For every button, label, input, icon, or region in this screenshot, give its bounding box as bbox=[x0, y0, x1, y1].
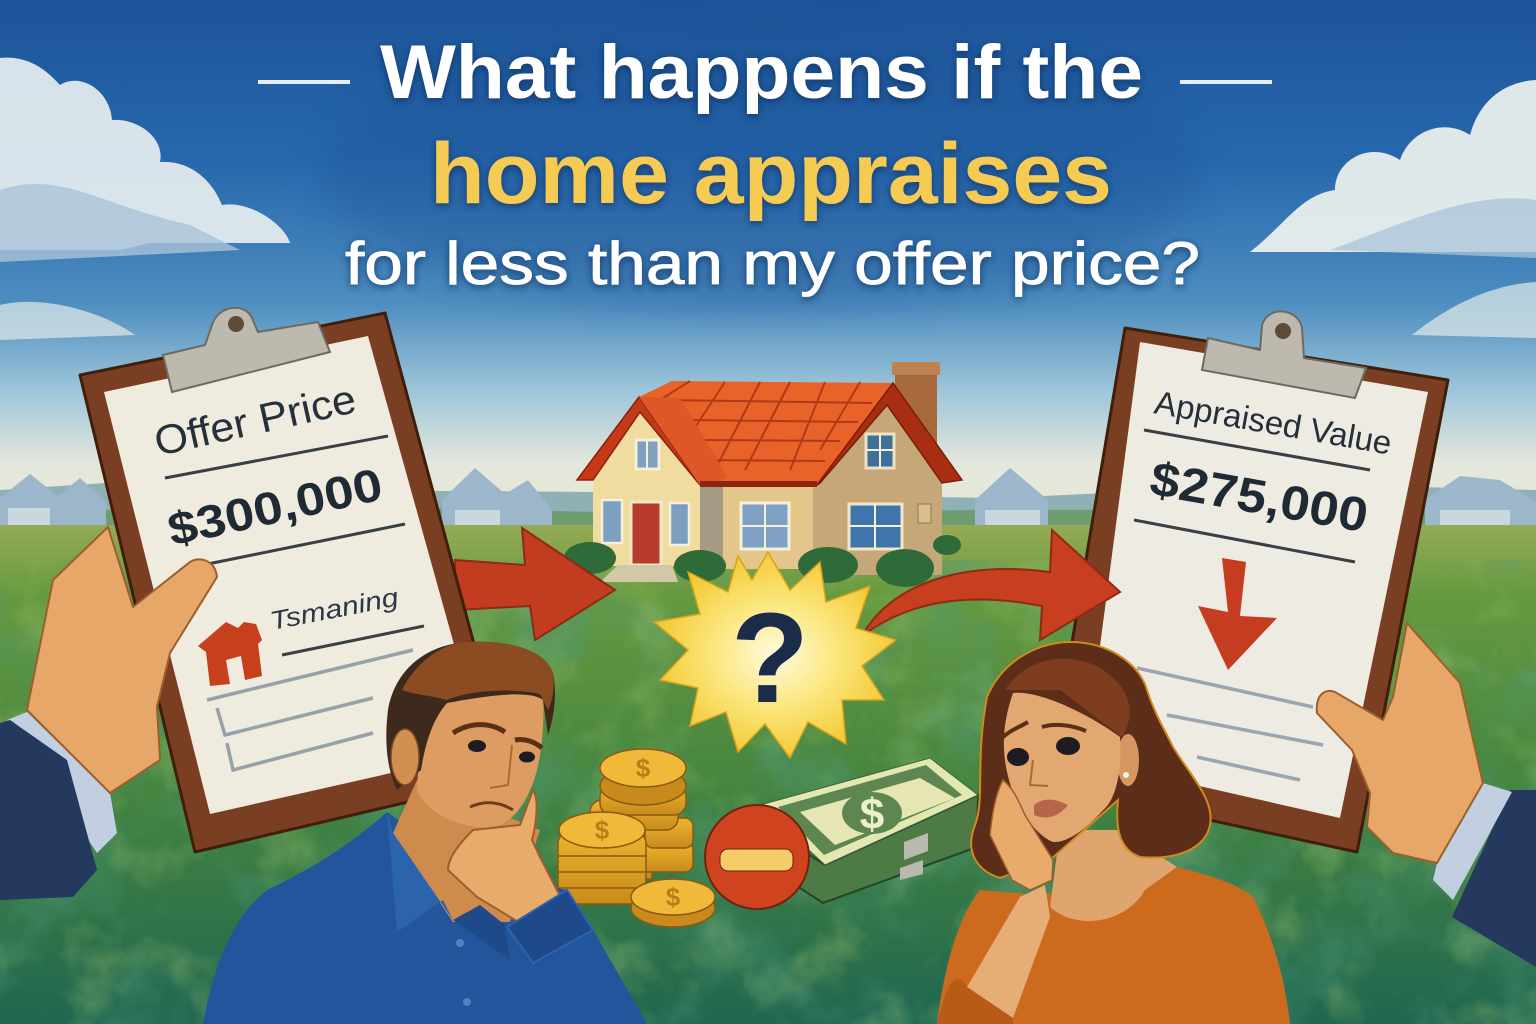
coin stack: back bbox=[590, 749, 693, 879]
bill patches bbox=[800, 778, 955, 845]
collar right bbox=[453, 905, 510, 960]
rule bbox=[1144, 430, 1370, 470]
bands bbox=[900, 833, 928, 880]
house: left gable overlap bbox=[639, 397, 728, 485]
house: bushes bbox=[564, 535, 961, 587]
clipboard: offer price bbox=[80, 308, 510, 852]
icon: red house bbox=[198, 622, 262, 686]
clipboard clip bbox=[1202, 311, 1366, 398]
cuff bbox=[1433, 783, 1512, 900]
collar left bbox=[387, 812, 453, 932]
house: right window bbox=[849, 504, 902, 549]
label: offer price: Offer Price bbox=[150, 376, 360, 465]
coin: single: $ bbox=[666, 882, 681, 912]
neck bbox=[393, 780, 540, 922]
question mark: ? bbox=[731, 587, 809, 730]
rule bbox=[1134, 520, 1355, 562]
bill inner bbox=[778, 765, 962, 855]
hand: left bbox=[0, 527, 217, 900]
background: sky bbox=[0, 0, 1536, 540]
dollar sign: $ bbox=[860, 790, 884, 839]
sleeve shadow bbox=[937, 979, 1013, 1024]
brows bbox=[453, 725, 542, 748]
title bbox=[345, 30, 1200, 297]
woman: worried bbox=[937, 642, 1290, 1024]
face bbox=[417, 683, 543, 828]
sleeve bbox=[0, 720, 97, 900]
house: eaves bbox=[700, 481, 817, 487]
house: right gable roof bbox=[817, 383, 962, 485]
shirt bbox=[203, 812, 647, 1024]
clipboard paper bbox=[104, 336, 484, 814]
palm and thumb bbox=[27, 527, 217, 793]
cuff bbox=[7, 712, 117, 853]
form lines bbox=[207, 650, 413, 770]
mouth bbox=[1034, 800, 1068, 818]
face bbox=[1004, 693, 1120, 842]
cuff bbox=[507, 890, 593, 963]
house: main roof bbox=[639, 381, 893, 485]
background: green field bbox=[0, 525, 1536, 1024]
palm and thumb bbox=[1317, 623, 1483, 863]
title line: for less than my offer price: for less than my offer price? bbox=[345, 230, 1200, 297]
clipboard clip bbox=[163, 308, 330, 392]
label: appraised value: Appraised Value bbox=[1152, 383, 1395, 462]
house: door side window left bbox=[602, 500, 622, 543]
mouth bbox=[470, 803, 513, 810]
cloud: low right bbox=[1412, 282, 1536, 338]
background: distant houses right bbox=[975, 468, 1536, 530]
form lines bbox=[1137, 668, 1323, 780]
house: door bbox=[631, 502, 661, 565]
house bbox=[564, 362, 962, 587]
house: left gable window bbox=[636, 440, 659, 469]
rule bbox=[165, 436, 388, 478]
house: left gable roof bbox=[577, 397, 700, 485]
ear bbox=[1117, 734, 1139, 786]
arrow: offer to house bbox=[455, 528, 615, 640]
top bbox=[937, 867, 1290, 1024]
hand on cheek bbox=[990, 780, 1053, 890]
house: right gable window bbox=[866, 434, 894, 468]
man: worried bbox=[203, 642, 647, 1024]
house: window bars bbox=[647, 434, 902, 549]
house: wall lamp bbox=[918, 504, 931, 523]
cloud: upper right bbox=[1250, 80, 1536, 258]
background: distant hills and trees bbox=[0, 482, 1536, 535]
hair bbox=[386, 642, 555, 790]
house: left gable wall bbox=[593, 408, 700, 566]
house: roof tile lines bbox=[660, 381, 872, 470]
clipboard board bbox=[1048, 328, 1448, 852]
icon: question starburst bbox=[654, 552, 896, 758]
nose bbox=[490, 745, 512, 788]
title line: what happens if the: What happens if the bbox=[380, 30, 1143, 115]
coin: single bbox=[631, 879, 715, 927]
title rule: right bbox=[1180, 80, 1272, 84]
eyes bbox=[1007, 737, 1080, 766]
eyes bbox=[468, 740, 535, 762]
clipboard paper bbox=[1085, 342, 1428, 818]
hand: right bbox=[1317, 623, 1536, 967]
house: chimney bbox=[892, 362, 940, 452]
ear bbox=[391, 729, 419, 785]
signature: Tsmaning bbox=[267, 582, 401, 636]
arrow: question to appraisal bbox=[862, 530, 1120, 640]
title rule: left bbox=[258, 80, 350, 84]
rule bbox=[282, 626, 424, 655]
coin stack: front bbox=[558, 812, 646, 904]
coin stack: back: $ bbox=[636, 753, 651, 783]
coin stack: front: $ bbox=[595, 815, 610, 845]
value: 275,000: $275,000 bbox=[1146, 453, 1372, 543]
cash stack bbox=[760, 758, 978, 903]
clipboard board bbox=[80, 313, 510, 852]
cloud: low left bbox=[0, 302, 135, 340]
forearm bbox=[967, 885, 1050, 1018]
house: centre wall bbox=[723, 484, 813, 569]
background: distant houses left bbox=[0, 468, 552, 530]
house: door side window right bbox=[670, 503, 689, 545]
house: right wing wall bbox=[813, 405, 942, 575]
clipboard: appraised value bbox=[1048, 311, 1448, 852]
icon: red down arrow bbox=[1198, 558, 1277, 670]
icon: minus sign bbox=[705, 805, 809, 909]
placket buttons bbox=[456, 939, 471, 1006]
bills side bbox=[800, 795, 978, 903]
bill top bbox=[760, 758, 978, 865]
coins bbox=[558, 749, 715, 927]
house: connector wall bbox=[700, 484, 723, 568]
hand on chin bbox=[448, 790, 562, 923]
sleeve bbox=[1452, 790, 1536, 967]
title line: home appraises: home appraises bbox=[430, 126, 1112, 222]
nose bbox=[1030, 760, 1048, 786]
brows bbox=[1002, 722, 1086, 738]
rule bbox=[188, 524, 405, 568]
cloud: upper left bbox=[0, 58, 290, 262]
hair bbox=[971, 642, 1211, 878]
value: 300,000: $300,000 bbox=[163, 458, 387, 556]
house: centre window bbox=[741, 503, 789, 549]
earring bbox=[1123, 772, 1129, 778]
house: steps bbox=[600, 565, 678, 582]
neck bbox=[1050, 830, 1177, 921]
